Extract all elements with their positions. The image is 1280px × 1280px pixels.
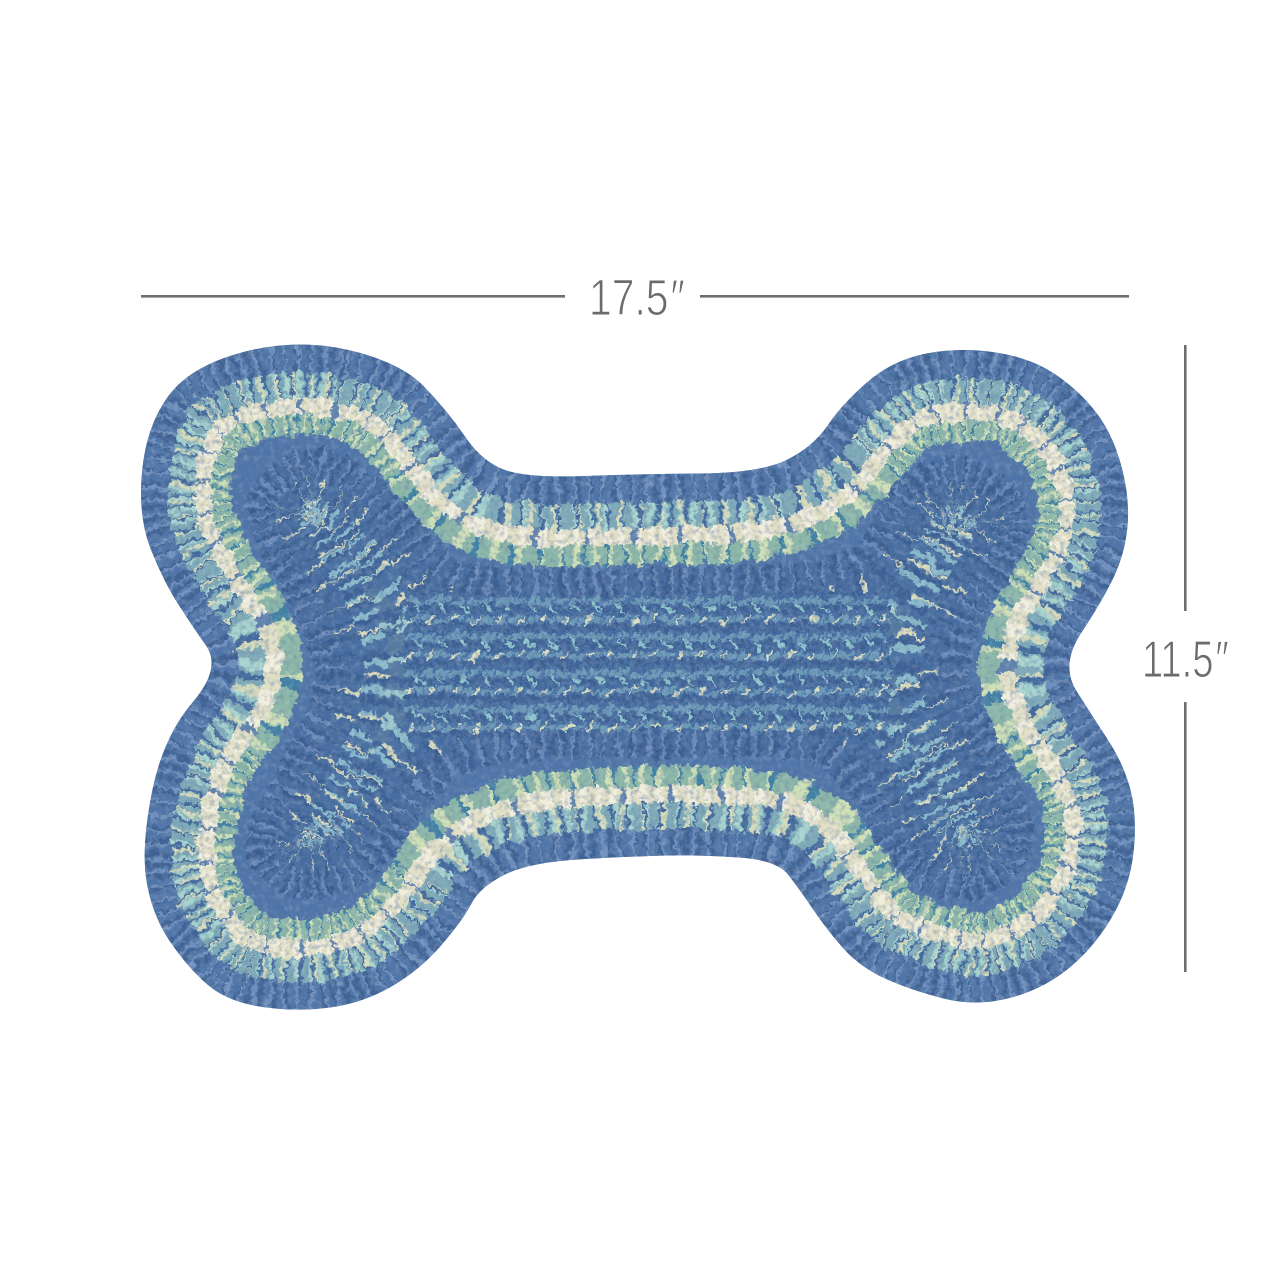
height line top [1184, 345, 1187, 611]
yarn texture [130, 330, 1150, 1020]
inner bone: lobes and centre braided rows [246, 448, 1033, 901]
infographic: braided bone mat with dimensions [141, 280, 1228, 1010]
centre herringbone rows [405, 590, 890, 740]
braided bone-shaped mat [130, 330, 1150, 1020]
height line bottom [1184, 702, 1187, 972]
outer concentric braided bands [166, 369, 1110, 984]
width label: 17.5″ [589, 269, 685, 326]
height label: 11.5″ [1142, 631, 1228, 689]
width line right [700, 295, 1129, 298]
displaced braided bands [141, 344, 1135, 1010]
outer solid blue border [141, 344, 1135, 1010]
width line left [141, 295, 565, 298]
